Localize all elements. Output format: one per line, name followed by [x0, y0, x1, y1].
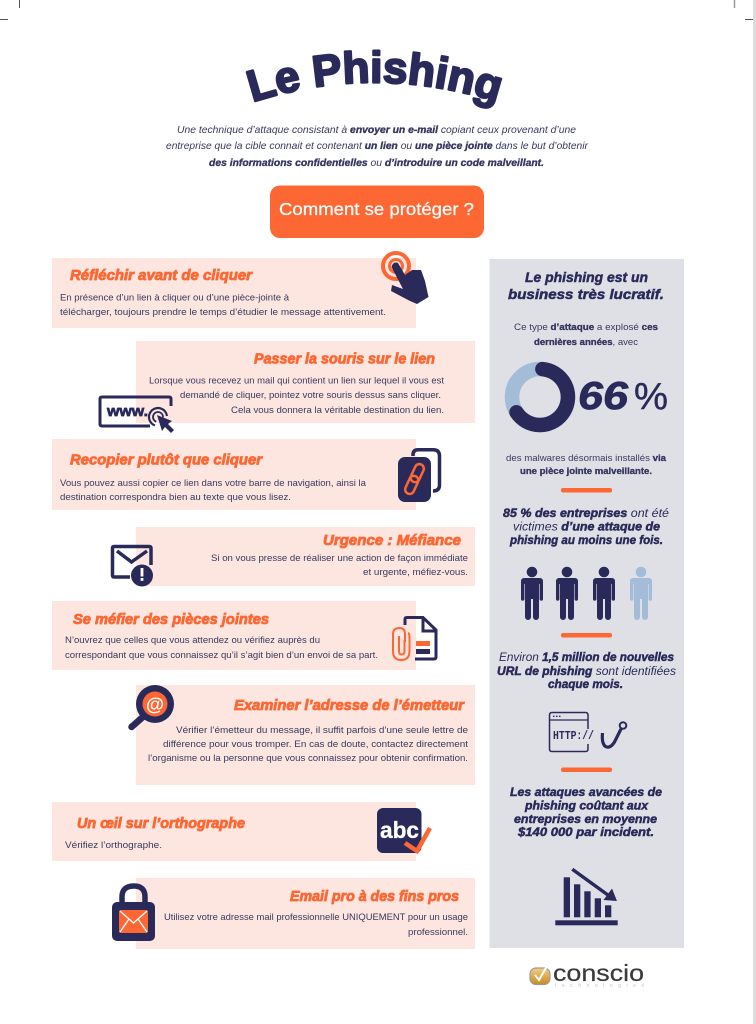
icon: linked documents — [398, 450, 440, 502]
icon: abc spell check: abc — [380, 817, 419, 843]
stat: 66 percent: % — [634, 376, 668, 418]
pictogram: four people — [521, 567, 652, 620]
intro text: des informations confidentielles ou d’introduire un code malveillant. — [209, 158, 544, 169]
text: attack growth: dernières années, avec — [534, 336, 638, 347]
panel: urgence méfiance — [112, 527, 475, 586]
panel: un oeil sur l'orthographe: Vérifiez l’orthographe. — [65, 839, 162, 850]
panel: statistics sidebar — [490, 259, 684, 948]
logo: conscio: technologies — [555, 983, 644, 989]
panel: passer la souris sur le lien: demandé de cliquer, pointez votre souris dessus sans cliquer. — [180, 389, 441, 400]
icon: magnifier with at sign — [132, 685, 174, 727]
panel: se méfier des pièces jointes: N’ouvrez que celles que vous attendez ou vérifiez auprès du — [65, 634, 320, 645]
panel: réfléchir avant de cliquer: télécharger, toujours prendre le temps d’étudier le message attentivement. — [60, 306, 386, 317]
panel: se méfier des pièces jointes: Se méfier des pièces jointes — [73, 611, 269, 628]
title: Le Phishing — [246, 50, 502, 109]
panel: passer la souris sur le lien: Passer la souris sur le lien — [254, 351, 435, 368]
text: 85 percent — [503, 506, 669, 547]
panel: passer la souris sur le lien: Cela vous donnera la véritable destination du lien. — [231, 404, 444, 415]
panel: urgence méfiance: Si on vous presse de réaliser une action de façon immédiate — [211, 552, 468, 563]
text: malwares: une pièce jointe malveillante. — [520, 465, 652, 476]
button: comment se protéger — [270, 186, 484, 238]
panel: email pro à des fins pros — [112, 878, 475, 949]
panel: examiner l'adresse de l'émetteur: différence pour vous tromper. En cas de doute, contactez directement — [163, 738, 468, 749]
panel: examiner l'adresse de l'émetteur: Vérifier l’émetteur du message, il suffit parfois d’une seule lettre de — [176, 724, 468, 735]
sidebar heading — [508, 269, 664, 302]
text: attack cost: Les attaques avancées de — [510, 785, 662, 799]
intro text: entreprise que la cible connait et contenant un lien ou une pièce jointe dans le but d’obtenir — [166, 141, 589, 152]
panel: réfléchir avant de cliquer: Réfléchir avant de cliquer — [70, 267, 253, 284]
text: attack cost: entreprises en moyenne — [514, 812, 657, 826]
icon: warning envelope — [112, 546, 153, 586]
icon: abc spell check — [377, 808, 430, 853]
intro text: Une technique d’attaque consistant à envoyer un e-mail copiant ceux provenant d’une — [177, 125, 577, 136]
icon: www browser bar — [100, 397, 174, 433]
panel: un oeil sur l'orthographe — [52, 802, 430, 861]
panel: réfléchir avant de cliquer — [52, 253, 428, 328]
panel: passer la souris sur le lien: Lorsque vous recevez un mail qui contient un lien sur lequel il vous est — [149, 374, 444, 386]
panel: se méfier des pièces jointes — [52, 601, 436, 670]
sidebar heading: Le phishing est un — [525, 269, 648, 285]
text: attack cost — [510, 785, 662, 839]
text: 1,5 million: Environ 1,5 million de nouvelles — [499, 650, 674, 664]
text: malwares: des malwares désormais installés via — [506, 452, 667, 463]
text: 1,5 million — [497, 650, 676, 691]
button: comment se protéger: Comment se protéger ? — [279, 199, 474, 219]
text: attack cost: phishing coûtant aux — [524, 798, 649, 812]
logo: conscio: conscio — [553, 960, 644, 986]
stat: 66 percent: 66 — [578, 375, 628, 418]
text: attack growth: Ce type d’attaque a explosé ces — [514, 321, 658, 332]
panel: examiner l'adresse de l'émetteur: l’organisme ou la personne que vous connaissez pour obtenir confirmation. — [148, 752, 468, 763]
text: 85 percent: phishing au moins une fois. — [509, 533, 663, 547]
icon: http window and hook — [550, 712, 626, 752]
panel: urgence méfiance: Urgence : Méfiance — [323, 532, 461, 549]
panel: se méfier des pièces jointes: correspondant que vous connaissez qu’il s’agit bien d’un envoi de sa part. — [65, 649, 378, 660]
text: attack growth — [514, 321, 658, 347]
text: attack cost: $140 000 par incident. — [517, 825, 654, 839]
text: 1,5 million: URL de phishing sont identifiées — [497, 664, 676, 678]
panel: examiner l'adresse de l'émetteur: Examiner l’adresse de l’émetteur — [234, 697, 465, 714]
icon: paperclip document — [393, 618, 436, 660]
panel: recopier plutôt que cliquer: destination correspondra bien au texte que vous lisez. — [60, 491, 291, 502]
panel: recopier plutôt que cliquer — [52, 439, 440, 510]
icon: padlock with envelope — [112, 886, 155, 941]
sidebar heading: business très lucratif. — [508, 286, 664, 302]
panel: recopier plutôt que cliquer: Recopier plutôt que cliquer — [70, 452, 263, 468]
text: malwares — [506, 452, 667, 476]
logo: conscio — [530, 960, 644, 989]
panel: email pro à des fins pros: Email pro à des fins pros — [290, 888, 459, 905]
panel: passer la souris sur le lien — [100, 341, 475, 433]
panel: réfléchir avant de cliquer: En présence d’un lien à cliquer ou d’une pièce-jointe à — [60, 292, 290, 302]
donut chart: 66 percent — [512, 369, 568, 425]
panel: examiner l'adresse de l'émetteur — [132, 685, 475, 785]
panel: email pro à des fins pros: professionnel. — [408, 926, 468, 937]
panel: email pro à des fins pros: Utilisez votre adresse mail professionnelle UNIQUEMENT pour un usage — [164, 911, 468, 922]
text: 1,5 million: chaque mois. — [548, 677, 623, 691]
icon: hand clicking target — [383, 253, 428, 304]
text: 85 percent: victimes d’une attaque de — [513, 520, 660, 534]
panel: recopier plutôt que cliquer: Vous pouvez aussi copier ce lien dans votre barre de navigation, ainsi la — [60, 477, 367, 488]
text: 85 percent: 85 % des entreprises ont été — [503, 506, 669, 520]
stat: 66 percent — [578, 375, 668, 418]
intro text — [166, 125, 589, 169]
icon: www browser bar: www. — [106, 404, 148, 420]
icon: http window and hook: HTTP:// — [553, 729, 594, 743]
panel: urgence méfiance: et urgente, méfiez-vous. — [363, 566, 468, 577]
icon: falling bar chart — [555, 869, 618, 925]
panel: un oeil sur l'orthographe: Un œil sur l’orthographe — [77, 815, 245, 832]
icon: magnifier with at sign: @ — [146, 694, 164, 714]
